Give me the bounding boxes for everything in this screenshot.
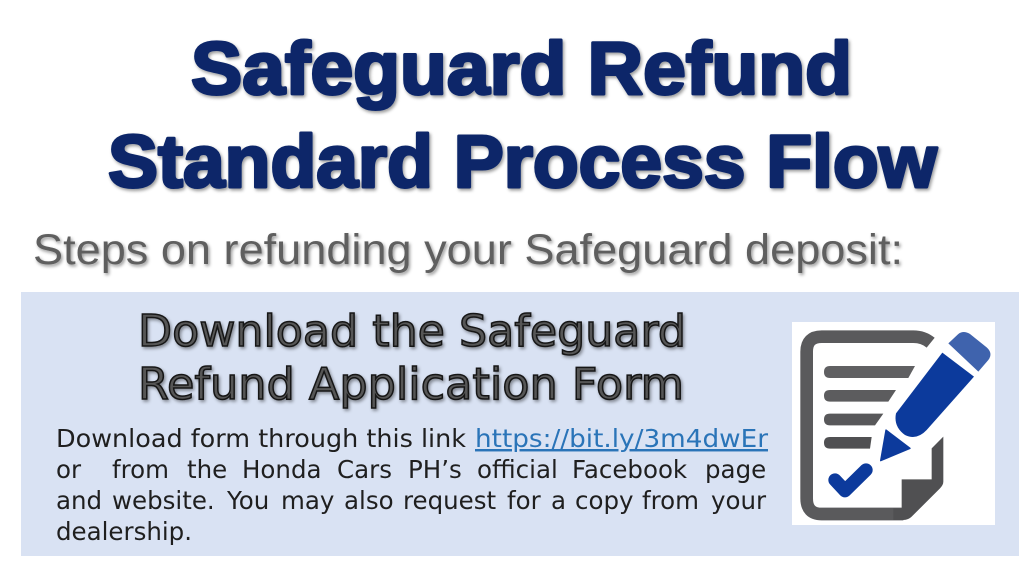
step description: a (551, 486, 566, 515)
step description: website. (112, 486, 215, 515)
step description: https://bit.ly/3m4dwEr (475, 424, 769, 453)
subtitle: Steps on refunding your Safeguard deposit: (33, 226, 903, 274)
step description: the (187, 455, 227, 484)
title: Standard Process Flow (108, 120, 937, 203)
step description: from (642, 486, 699, 515)
step description: Download form through this link (56, 424, 467, 453)
step description: may (281, 486, 334, 515)
step description: Facebook (572, 455, 688, 484)
step description (56, 424, 769, 546)
step description: You (226, 486, 269, 515)
step description: also (344, 486, 394, 515)
step description: PH’s (408, 455, 462, 484)
step description: dealership. (56, 517, 192, 546)
step description: official (477, 455, 558, 484)
title (108, 27, 937, 203)
step description: or (56, 455, 82, 484)
step description: from (112, 455, 169, 484)
step heading (138, 306, 686, 410)
icon: form with pencil (792, 322, 995, 525)
step description: your (711, 486, 767, 515)
step heading: Download the Safeguard (138, 306, 686, 357)
step description: Cars (337, 455, 392, 484)
step description: request (403, 486, 497, 515)
title: Safeguard Refund (191, 27, 852, 110)
panel: step 1 download form (21, 292, 1019, 556)
step description: page (705, 455, 766, 484)
step description: copy (575, 486, 634, 515)
step heading: Refund Application Form (138, 359, 684, 410)
step description: Honda (242, 455, 322, 484)
step description: for (507, 486, 542, 515)
step description: and (56, 486, 102, 515)
